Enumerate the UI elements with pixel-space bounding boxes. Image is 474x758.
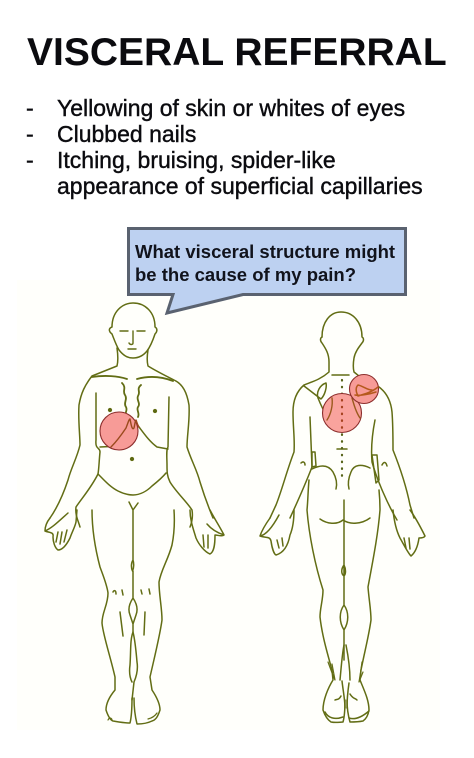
referral pain circle: front xyxy=(100,412,139,450)
symptom list: Clubbed nails xyxy=(57,121,196,147)
back body figure xyxy=(260,312,425,722)
symptom list: Itching, bruising, spider-like xyxy=(57,147,336,173)
symptom list xyxy=(26,95,423,200)
speech bubble text: be the cause of my pain? xyxy=(135,264,356,285)
speech bubble text xyxy=(135,240,395,285)
referral pain circle: back shoulder xyxy=(350,374,378,404)
title: VISCERAL REFERRAL xyxy=(27,31,447,74)
front body figure xyxy=(45,303,224,724)
referral pain circle: back centre xyxy=(322,394,362,432)
diagram background xyxy=(17,280,440,730)
symptom list: - xyxy=(26,147,34,173)
symptom list: appearance of superficial capillaries xyxy=(57,173,423,199)
symptom list: Yellowing of skin or whites of eyes xyxy=(57,95,405,121)
speech bubble xyxy=(128,228,406,313)
speech bubble text: What visceral structure might xyxy=(135,240,395,262)
symptom list: - xyxy=(26,95,34,121)
symptom list: - xyxy=(26,121,34,147)
